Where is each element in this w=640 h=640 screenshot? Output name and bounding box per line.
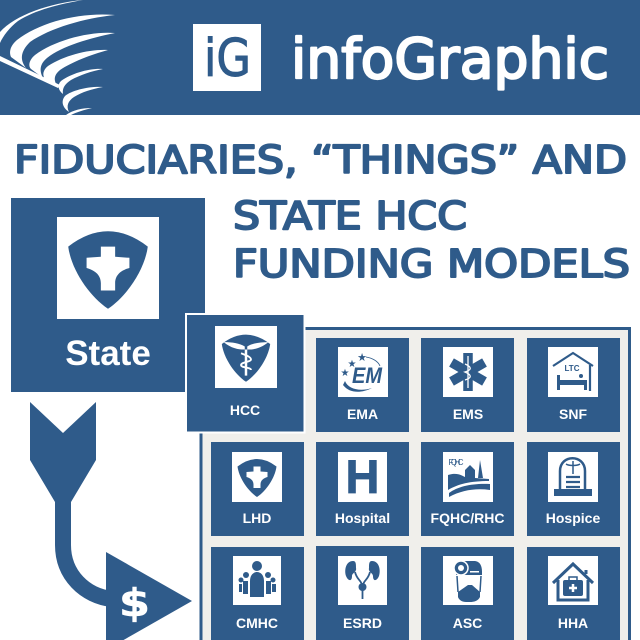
tile: ASC bbox=[421, 547, 514, 640]
tile: HCC bbox=[186, 314, 304, 432]
tile: Hospice bbox=[527, 442, 620, 536]
logo wordmark: infoGraphic bbox=[291, 27, 609, 91]
tile: EMA bbox=[316, 338, 409, 432]
tile: HHA: HHA bbox=[558, 615, 588, 631]
tile: EMA: EM bbox=[352, 363, 383, 388]
panel: State bbox=[11, 198, 205, 392]
panel: provider grid frame bbox=[201, 328, 630, 640]
arrow: funding flow: $ bbox=[119, 581, 150, 625]
tile: EMS bbox=[421, 338, 514, 432]
tile: SNF bbox=[527, 338, 620, 432]
tile: EMS: EMS bbox=[453, 406, 483, 422]
tile: EMA: EMA bbox=[347, 406, 378, 422]
title bbox=[14, 138, 630, 286]
tile: Hospice: Hospice bbox=[546, 510, 600, 526]
title: STATE HCC bbox=[233, 194, 467, 238]
tile: HHA bbox=[527, 547, 620, 640]
tile: EMA: ★ bbox=[357, 352, 367, 364]
title: FUNDING MODELS bbox=[233, 242, 630, 286]
tile: FQHC/RHC bbox=[421, 442, 514, 536]
header banner bbox=[0, 0, 640, 115]
tile: CMHC bbox=[211, 547, 304, 640]
tile: EMA: ★ bbox=[341, 368, 350, 379]
tile: ESRD bbox=[316, 546, 409, 640]
tile: Hospital: H bbox=[346, 450, 379, 503]
panel: State: State bbox=[65, 334, 151, 373]
tile: ESRD: ESRD bbox=[343, 615, 382, 631]
tile: SNF: SNF bbox=[559, 406, 587, 422]
icon: state shield bbox=[68, 231, 148, 309]
tile: ASC: ASC bbox=[453, 615, 482, 631]
title: FIDUCIARIES, “THINGS” AND bbox=[14, 138, 627, 182]
tile: LHD bbox=[211, 442, 304, 536]
tile: LHD: LHD bbox=[243, 510, 271, 526]
logo box: iG bbox=[204, 29, 251, 89]
tile: HCC: HCC bbox=[230, 402, 260, 418]
tile: FQHC/RHC: FQHC/RHC bbox=[431, 510, 504, 526]
tile: CMHC: CMHC bbox=[236, 615, 278, 631]
icon: tornado bbox=[0, 0, 115, 115]
tile: SNF: LTC bbox=[565, 364, 580, 373]
tile: FQHC/RHC: FQHC bbox=[448, 458, 464, 467]
tile: Hospital: Hospital bbox=[335, 510, 390, 526]
arrow: funding flow bbox=[30, 402, 192, 640]
tile: Hospital bbox=[316, 442, 409, 536]
tile: EMA: ★ bbox=[348, 359, 357, 370]
